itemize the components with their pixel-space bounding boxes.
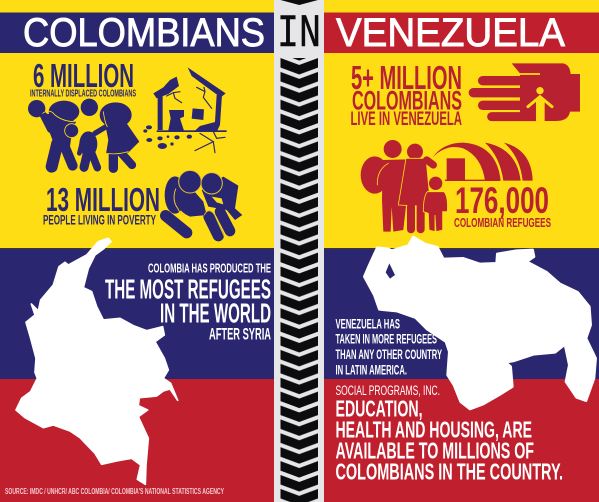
stat: 5+ million Colombians: 5+ MILLION: [351, 59, 462, 96]
icon: people embracing: [165, 170, 242, 237]
text: Colombia refugees: THE MOST REFUGEES: [105, 273, 271, 304]
stat: 5+ million Colombians: LIVE IN VENEZUELA: [350, 109, 462, 130]
text: Venezuela has taken in refugees: [336, 316, 442, 378]
stat: 5+ million Colombians: [350, 59, 462, 130]
map: Venezuela: [364, 237, 596, 409]
map: Colombia: [16, 238, 178, 484]
stat: 5+ million Colombians: COLOMBIANS: [352, 85, 462, 115]
text: social programs: EDUCATION,: [336, 396, 422, 422]
source line: SOURCE: IMDC / UNHCR/ ABC COLOMBIA/ COLOMBIA'S NATIONAL STATISTICS AGENCY: [5, 487, 224, 496]
stat: 6 million displaced: [30, 57, 136, 100]
centre chevron column: [274, 0, 324, 502]
stat: 176,000 refugees: 176,000: [455, 180, 549, 221]
stat: 13 million in poverty: PEOPLE LIVING IN POVERTY: [43, 212, 156, 228]
stat: 13 million in poverty: 13 MILLION: [46, 181, 160, 218]
text: social programs: [336, 383, 563, 484]
text: Colombia refugees: COLOMBIA HAS PRODUCED THE: [148, 260, 271, 275]
text: Venezuela has taken in refugees: IN LATIN AMERICA.: [336, 363, 407, 378]
icon: displaced family: [28, 99, 139, 168]
text: Venezuela has taken in refugees: VENEZUELA HAS: [336, 316, 400, 331]
title band: Colombians: COLOMBIANS: [23, 11, 265, 55]
text: social programs: SOCIAL PROGRAMS, INC.: [336, 383, 440, 398]
icon: hand holding person: [472, 63, 580, 121]
stat: 6 million displaced: 6 MILLION: [33, 57, 134, 94]
text: Venezuela has taken in refugees: TAKEN IN MORE REFUGEES: [336, 332, 437, 347]
stat: 6 million displaced: INTERNALLY DISPLACED COLOMBIANS: [30, 88, 136, 100]
text: Venezuela has taken in refugees: THAN ANY OTHER COUNTRY: [336, 347, 442, 362]
text: Colombia refugees: AFTER SYRIA: [209, 324, 271, 343]
title word: IN: IN: [277, 8, 321, 60]
stat: 176,000 refugees: [454, 180, 551, 230]
title band: Venezuela: VENEZUELA: [336, 11, 565, 55]
text: Colombia refugees: [105, 260, 271, 343]
stat: 13 million in poverty: [43, 181, 160, 228]
text: Colombia refugees: IN THE WORLD: [160, 298, 271, 329]
icon: ruined house: [143, 67, 227, 153]
icon: refugee family and shelter: [361, 140, 533, 232]
